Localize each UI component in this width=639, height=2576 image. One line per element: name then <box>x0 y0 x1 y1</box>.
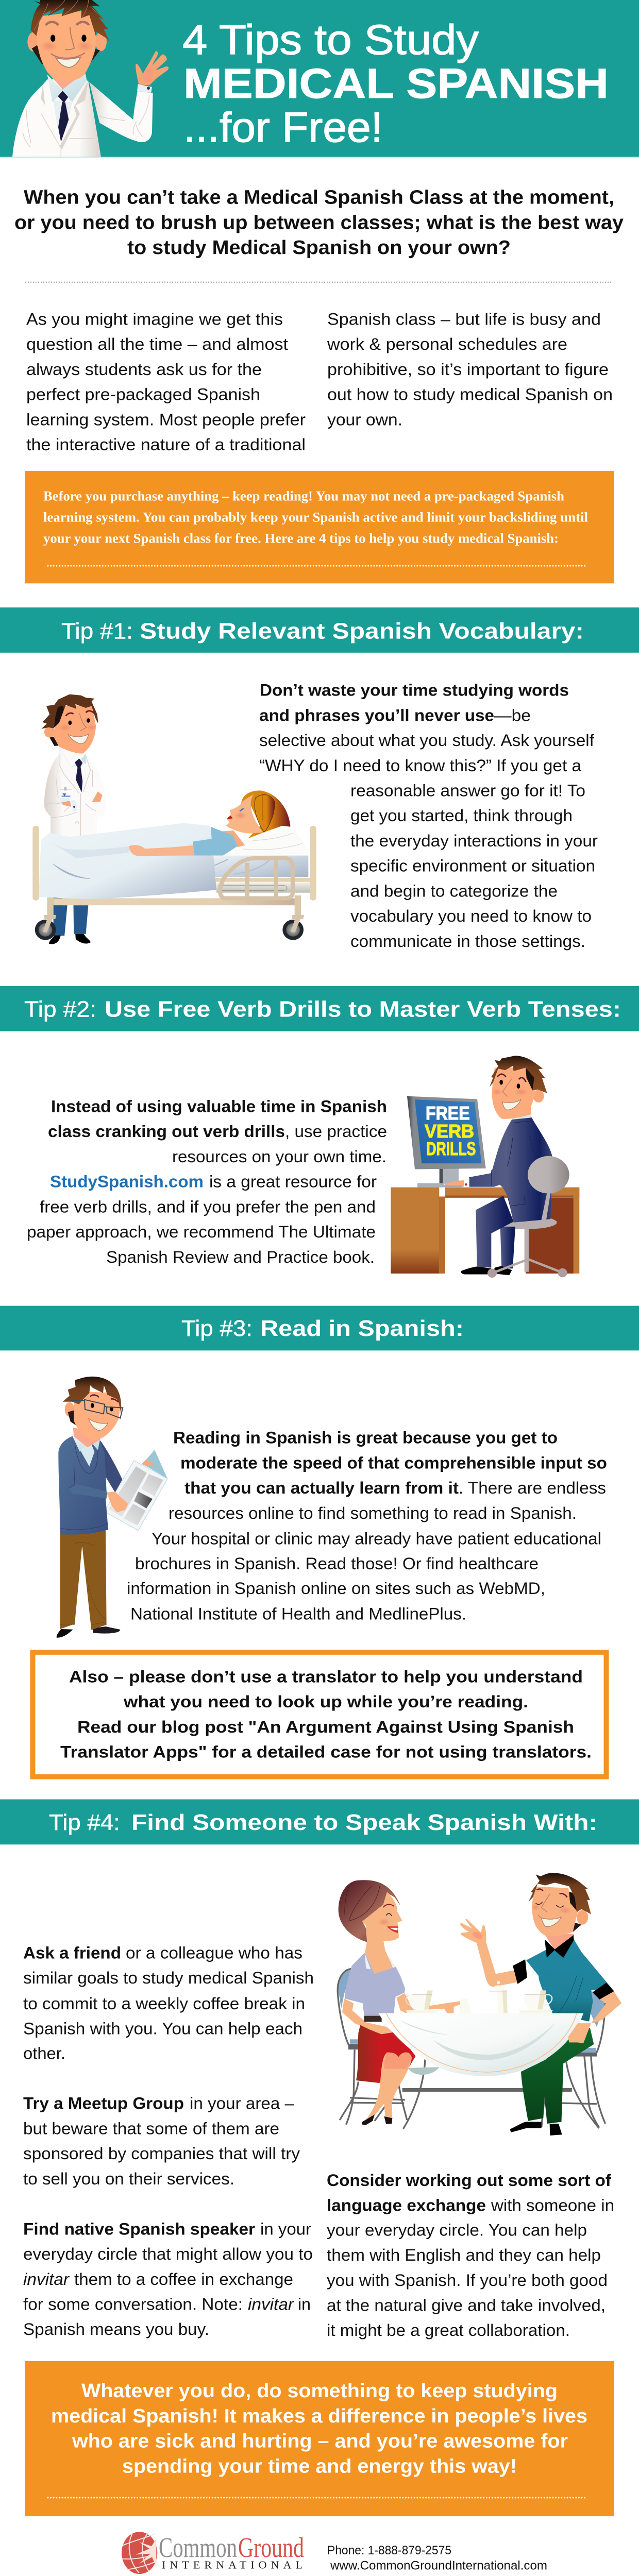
tip 1 heading band <box>0 607 639 653</box>
callout: don't use a translator: Read our blog post "An Argument Against Using Spanish <box>77 1718 574 1737</box>
man <box>460 1873 621 2136</box>
find native speaker: in <box>298 2295 311 2314</box>
tip 4 right column text <box>327 2171 614 2340</box>
tip 1 heading band: Study Relevant Spanish Vocabulary: <box>140 619 584 643</box>
tip 4 right column text: with someone in <box>491 2196 614 2215</box>
hospital bed <box>32 826 316 940</box>
callout: don't use a translator: what you need to look up while you’re reading. <box>123 1693 528 1711</box>
try a meetup group: sponsored by companies that will try <box>23 2145 300 2163</box>
tip 3 body text: that you can actually learn from it <box>184 1479 459 1498</box>
find native speaker: invitar <box>23 2270 70 2289</box>
try a meetup group: in your area – <box>190 2094 295 2113</box>
footer contact details <box>327 2544 547 2572</box>
patient <box>39 790 308 899</box>
tip 1 heading band: Tip #1: <box>61 619 133 643</box>
computer monitor: VERB <box>425 1121 474 1142</box>
chairs and table legs <box>338 1969 606 2129</box>
orange callout: before you purchase <box>25 471 614 583</box>
tip 1 body text: —be <box>494 706 531 725</box>
find native speaker: everyday circle that might allow you to <box>23 2245 313 2264</box>
title: 4 Tips to Study <box>182 16 479 63</box>
tip 3 body text: Reading in Spanish is great because you get to <box>173 1429 558 1447</box>
tip 1 body text: reasonable answer go for it! To <box>350 782 585 800</box>
try a meetup group: to sell you on their services. <box>23 2170 234 2189</box>
tip 3 body text: moderate the speed of that comprehensible input so <box>180 1454 607 1472</box>
tip 2 body text: Spanish Review and Practice book. <box>106 1248 375 1267</box>
tip 4 right column text: Consider working out some sort of <box>327 2171 612 2190</box>
tip 3 heading band: Read in Spanish: <box>260 1316 464 1341</box>
tip 1 body text <box>259 681 598 951</box>
man <box>444 1056 557 1275</box>
ask a friend: similar goals to study medical Spanish <box>23 1969 314 1988</box>
office chair <box>487 1156 569 1278</box>
try a meetup group <box>23 2094 300 2189</box>
tip 1 body text: specific environment or situation <box>350 857 595 876</box>
footer contact details: www.CommonGroundInternational.com <box>330 2559 547 2572</box>
tip 3 body text: . There are endless <box>459 1479 606 1498</box>
tip 1 body text: selective about what you study. Ask yourself <box>259 731 595 750</box>
logo wordmark <box>159 2532 304 2571</box>
orange closing callout: spending your time and energy this way! <box>122 2455 517 2477</box>
intro paragraph left column: always students ask us for the <box>26 360 262 379</box>
tip 2 body text: , use practice <box>285 1123 387 1141</box>
header band <box>0 0 639 157</box>
tip 4 heading band: Tip #4: <box>49 1810 120 1835</box>
tip 1 body text: the everyday interactions in your <box>350 832 598 851</box>
intro paragraph right column: out how to study medical Spanish on <box>327 385 613 404</box>
try a meetup group: Try a Meetup Group <box>23 2094 184 2113</box>
ask a friend: other. <box>23 2044 65 2063</box>
tip 3 body text: Your hospital or clinic may already have patient educational <box>152 1530 601 1548</box>
tip 4 right column text: your everyday circle. You can help <box>327 2221 587 2240</box>
intro paragraph left column <box>26 310 306 454</box>
intro paragraph right column: Spanish class – but life is busy and <box>327 310 601 329</box>
tip 3 heading band <box>0 1306 639 1350</box>
tip 1 body text: get you started, think through <box>350 807 573 825</box>
tip 1 body text: vocabulary you need to know to <box>350 907 592 926</box>
intro paragraph right column: your own. <box>327 411 402 429</box>
intro question: to study Medical Spanish on your own? <box>127 237 511 259</box>
tip 4 right column text: language exchange <box>327 2196 486 2215</box>
callout: don't use a translator: Translator Apps" for a detailed case for not using translators. <box>60 1743 592 1762</box>
intro paragraph left column: learning system. Most people prefer <box>26 411 306 429</box>
intro paragraph left column: perfect pre-packaged Spanish <box>26 385 260 404</box>
intro paragraph left column: As you might imagine we get this <box>26 310 283 329</box>
icon: globe <box>122 2530 161 2574</box>
doctor <box>41 694 106 944</box>
tip 4 right column text: it might be a great collaboration. <box>327 2321 570 2340</box>
try a meetup group: but beware that some of them are <box>23 2120 279 2138</box>
intro paragraph right column <box>327 310 613 429</box>
tip 4 right column text: you with Spanish. If you’re both good <box>327 2271 608 2290</box>
tip 4 right column text: them with English and they can help <box>327 2246 601 2265</box>
intro question: When you can’t take a Medical Spanish Class at the moment, <box>24 187 614 209</box>
logo wordmark: INTERNATIONAL <box>162 2559 302 2571</box>
ask a friend <box>23 1944 314 2063</box>
computer monitor <box>407 1096 486 1188</box>
tip 2 body text: resources on your own time. <box>172 1147 386 1166</box>
tip 3 heading band: Tip #3: <box>181 1316 253 1341</box>
tip 1 body text: Don’t waste your time studying words <box>260 681 569 700</box>
tip 2 body text: class cranking out verb drills <box>48 1123 285 1141</box>
ask a friend: to commit to a weekly coffee break in <box>23 1994 305 2013</box>
ask a friend: or a colleague who has <box>126 1944 302 1962</box>
find native speaker: for some conversation. Note: <box>23 2295 243 2314</box>
find native speaker: Spanish means you buy. <box>23 2320 209 2339</box>
logo wordmark: Ground <box>238 2532 304 2563</box>
tip 3 body text: resources online to find something to read in Spanish. <box>169 1504 577 1523</box>
intro paragraph right column: prohibitive, so it’s important to figure <box>327 360 609 379</box>
computer monitor: DRILLS <box>426 1138 476 1159</box>
intro paragraph right column: work & personal schedules are <box>327 335 567 354</box>
tip 4 heading band <box>0 1799 639 1844</box>
find native speaker: invitar <box>248 2295 295 2314</box>
tip 2 illustration: man at computer with free verb drills <box>391 1056 579 1278</box>
tip 2 body text: is a great resource for <box>209 1173 377 1192</box>
intro paragraph left column: question all the time – and almost <box>26 335 288 354</box>
orange closing callout: who are sick and hurting – and you’re awesome for <box>72 2430 568 2452</box>
tip 2 heading band: Use Free Verb Drills to Master Verb Tenses: <box>105 997 621 1022</box>
orange callout: before you purchase: learning system. You can probably keep your Spanish active and limit your backsliding until <box>43 510 588 524</box>
tip 2 body text: paper approach, we recommend The Ultimate <box>27 1223 376 1242</box>
icon: waving doctor <box>12 0 169 157</box>
tip 1 illustration: doctor and patient in bed <box>32 694 316 944</box>
tip 1 body text: communicate in those settings. <box>350 932 585 951</box>
tip 2 body text <box>27 1097 387 1267</box>
woman <box>339 1880 415 2125</box>
tip 2 body text: Instead of using valuable time in Spanish <box>51 1097 387 1116</box>
ask a friend: Ask a friend <box>23 1944 121 1962</box>
tip 2 heading band <box>0 986 639 1031</box>
tip 1 body text: and begin to categorize the <box>350 882 558 901</box>
title: MEDICAL SPANISH <box>183 60 609 107</box>
tip 3 body text: information in Spanish online on sites such as WebMD, <box>127 1579 545 1598</box>
ask a friend: Spanish with you. You can help each <box>23 2020 302 2038</box>
tip 4 left column text <box>23 1944 314 2339</box>
title <box>182 16 609 151</box>
tip 3 illustration: man with glasses reading <box>57 1377 167 1638</box>
tablecloth <box>378 2013 583 2076</box>
intro question <box>14 187 624 259</box>
footer logo <box>122 2530 304 2574</box>
orange closing callout: medical Spanish! It makes a difference in people’s lives <box>51 2405 587 2427</box>
orange closing callout <box>25 2361 614 2516</box>
computer monitor: FREE <box>426 1103 470 1124</box>
desk <box>391 1188 579 1274</box>
man's hand on table <box>568 2023 591 2043</box>
tip 2 body text: StudySpanish.com <box>50 1173 204 1192</box>
orange closing callout: Whatever you do, do something to keep studying <box>81 2380 558 2402</box>
tip 2 heading band: Tip #2: <box>24 997 96 1022</box>
tip 1 body text: “WHY do I need to know this?” If you get a <box>259 756 582 775</box>
orange callout: before you purchase: Before you purchase anything – keep reading! You may not need a pre-packaged Spanish <box>43 488 564 503</box>
intro question: or you need to brush up between classes; what is the best way <box>14 212 624 233</box>
find native speaker: them to a coffee in exchange <box>74 2270 293 2289</box>
find native speaker: in your <box>260 2220 311 2239</box>
tip 3 body text <box>127 1429 607 1624</box>
tip 3 body text: brochures in Spanish. Read those! Or find healthcare <box>135 1555 539 1573</box>
tip 4 heading band: Find Someone to Speak Spanish With: <box>131 1810 597 1835</box>
tip 2 body text: free verb drills, and if you prefer the pen and <box>40 1198 376 1216</box>
find native speaker: Find native Spanish speaker <box>23 2220 255 2239</box>
cups and teapot <box>406 1981 553 2013</box>
tip 3 body text: National Institute of Health and MedlinePlus. <box>130 1605 466 1624</box>
title: ...for Free! <box>183 104 383 151</box>
tip 1 body text: and phrases you’ll never use <box>259 706 494 725</box>
newspaper <box>104 1450 167 1531</box>
tip 4 right column text: at the natural give and take involved, <box>327 2296 606 2315</box>
tip 4 illustration: two people at a cafe table <box>338 1873 621 2136</box>
find native speaker <box>23 2220 313 2339</box>
logo wordmark: Common <box>159 2532 237 2563</box>
callout: don't use a translator <box>33 1652 606 1777</box>
intro paragraph left column: the interactive nature of a traditional <box>26 435 306 454</box>
callout: don't use a translator: Also – please don’t use a translator to help you understand <box>69 1668 583 1686</box>
orange callout: before you purchase: your your next Spanish class for free. Here are 4 tips to help you study medical Spanish: <box>43 531 559 546</box>
footer contact details: Phone: 1-888-879-2575 <box>327 2544 451 2557</box>
